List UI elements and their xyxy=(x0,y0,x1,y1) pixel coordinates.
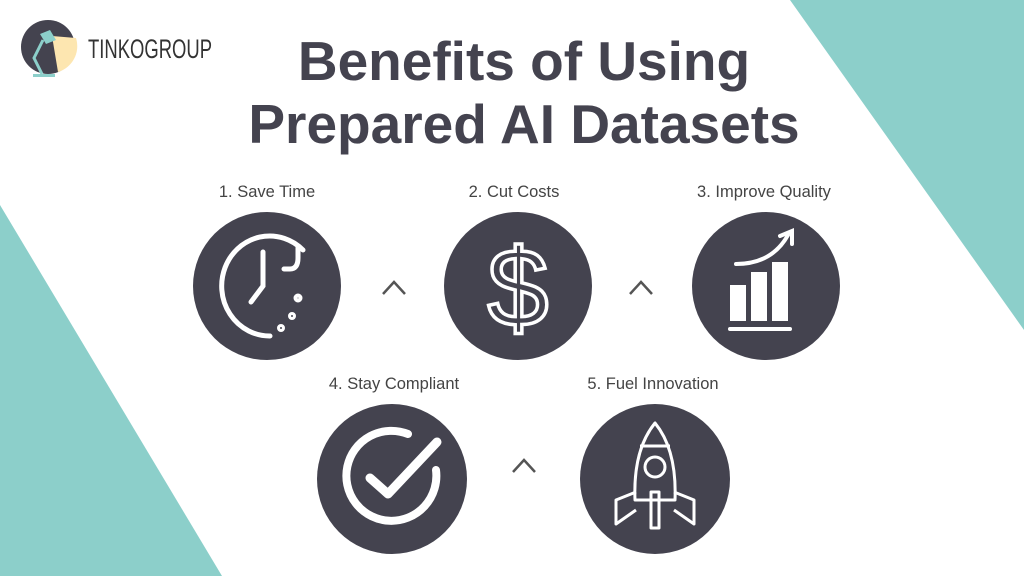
labels: 1. Save Time xyxy=(219,183,315,201)
logo: TINKOGROUP xyxy=(88,34,212,64)
labels xyxy=(219,183,832,393)
logo xyxy=(21,20,212,77)
icon: check xyxy=(317,404,467,554)
icon: dollar xyxy=(444,212,592,360)
labels: 2. Cut Costs xyxy=(469,183,559,201)
arrow xyxy=(383,282,405,294)
labels: 4. Stay Compliant xyxy=(329,375,460,393)
arrow xyxy=(630,282,652,294)
icon: dollar: $ xyxy=(487,227,549,350)
icon: rocket xyxy=(580,404,730,554)
icon: chart xyxy=(692,212,840,360)
title xyxy=(248,30,800,155)
background: teal bottom-left xyxy=(0,205,222,576)
labels: 3. Improve Quality xyxy=(697,183,832,201)
arrow xyxy=(513,460,535,472)
icon: clock xyxy=(193,212,341,360)
labels: 5. Fuel Innovation xyxy=(587,375,719,393)
title: Benefits of Using xyxy=(298,30,750,92)
title: Prepared AI Datasets xyxy=(248,93,800,155)
background: teal top-right xyxy=(790,0,1024,330)
